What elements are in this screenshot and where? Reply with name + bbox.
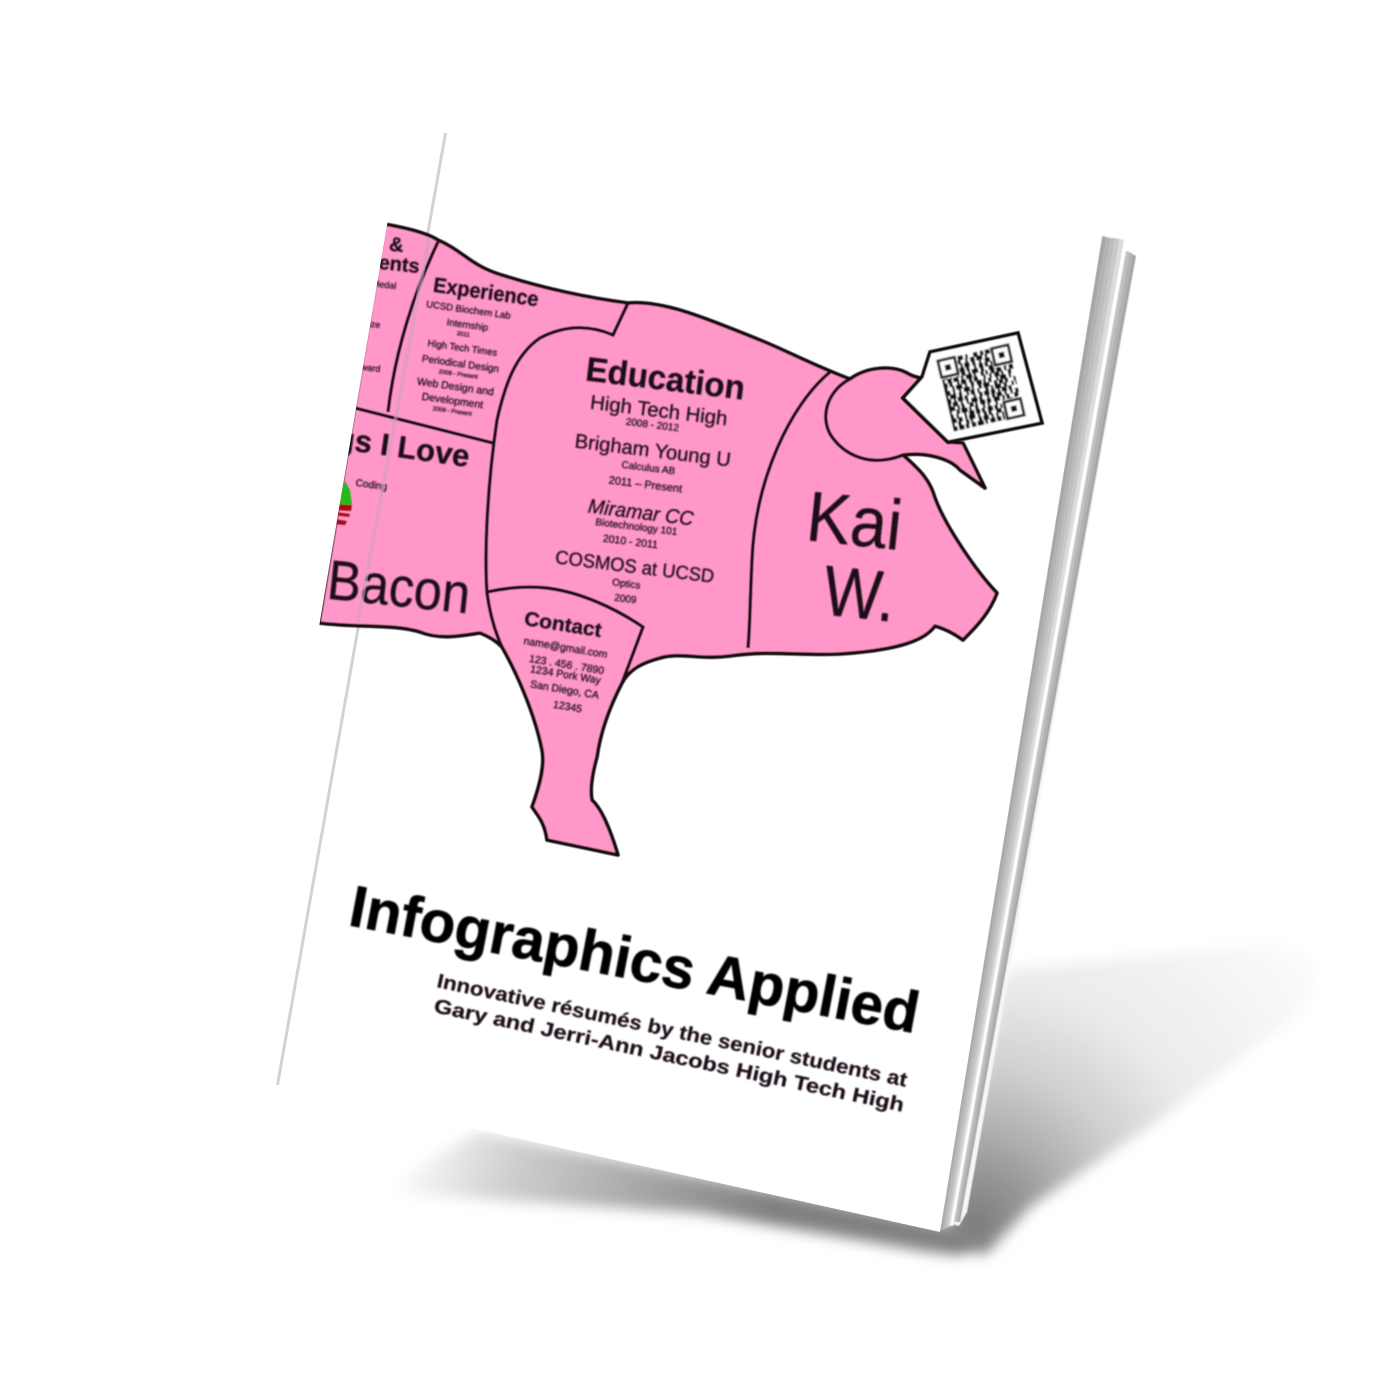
label: Experience: High Tech Times — [427, 338, 498, 359]
label: Education — [554, 350, 747, 606]
spine line behind artwork — [276, 133, 447, 1085]
label: Contact — [523, 608, 609, 715]
label: Awards and Achievements: Medal — [371, 278, 397, 291]
QR finder squares — [935, 342, 1027, 434]
label: Experience: Experience — [432, 274, 540, 311]
cut line: ear curl — [826, 379, 903, 460]
label: Kai W.: W. — [820, 552, 899, 638]
label: Awards and Achievements: Prize — [359, 318, 381, 330]
label: Education: 2011 – Present — [608, 475, 683, 495]
label: Experience — [416, 274, 540, 418]
cut line: education outline — [486, 303, 628, 647]
label: Education: Education — [584, 350, 747, 408]
tag outline — [903, 333, 1042, 442]
label: Experience: Web Design and — [416, 376, 495, 398]
label: Education: High Tech High — [589, 392, 729, 430]
label: Experience: 2009 - Present — [438, 369, 478, 381]
QR code tag — [903, 333, 1042, 442]
cut line: contact top — [487, 587, 643, 683]
label: Awards and Achievements: Awards & — [311, 225, 405, 257]
label: Education: Calculus AB — [621, 460, 676, 477]
label: Kai W. — [809, 490, 902, 622]
label: Contact: 1234 Pork Way — [529, 663, 602, 687]
label: Contact: Contact — [523, 608, 604, 642]
label: Kai W.: Kai — [803, 477, 906, 566]
pig cut-chart résumé — [269, 224, 997, 855]
label: Education: 2009 — [614, 593, 637, 606]
label: Education: 2010 - 2011 — [602, 533, 659, 551]
chart: things-I-love pie slice — [333, 481, 352, 525]
label: Experience: 2009 - Present — [432, 406, 472, 418]
book cover page — [277, 133, 1102, 1232]
label: Education: COSMOS at UCSD — [554, 547, 715, 588]
cut line: things I love top — [355, 408, 493, 443]
title: Infographics Applied — [345, 874, 925, 1046]
subtitle: Innovative résumés by the senior students at — [435, 970, 909, 1092]
label: Experience: 2011 — [456, 331, 471, 339]
label: Things I Love: Things I Love — [269, 411, 472, 474]
subtitle: Gary and Jerri-Ann Jacobs High Tech High — [432, 995, 906, 1117]
pig silhouette — [319, 224, 997, 855]
label: Experience: Development — [421, 391, 484, 411]
page edges of the booklet — [940, 236, 1136, 1230]
label: Education: Brigham Young U — [573, 431, 732, 472]
label: Awards and Achievements: Achievements — [284, 242, 421, 278]
label: Awards and Achievements — [362, 236, 420, 373]
label: Experience: Internship — [446, 317, 489, 334]
spine highlight over pig — [356, 237, 431, 622]
label: Experience: Periodical Design — [421, 354, 500, 375]
shadow: bottom floor shadow — [375, 1132, 985, 1255]
shadow: right floor shadow — [945, 945, 1317, 1255]
label: Coding: Coding — [355, 478, 388, 493]
QR code — [935, 342, 1027, 434]
label: Contact: name@gmail.com — [523, 635, 609, 661]
label: Experience: UCSD Biochem Lab — [425, 299, 511, 322]
label: Education: 2008 - 2012 — [625, 417, 680, 434]
label: Awards and Achievements: Award — [355, 361, 381, 374]
cut line: head — [748, 372, 830, 648]
label: Contact: 123 . 456 . 7890 — [528, 653, 605, 677]
label: Contact: San Diego, CA — [529, 678, 600, 702]
label: Bacon: Bacon — [325, 548, 473, 625]
label: Education: Miramar CC — [587, 496, 695, 530]
label: Education: Optics — [612, 577, 641, 592]
label: Contact: 12345 — [552, 699, 583, 715]
cut line: awards / experience — [388, 242, 438, 412]
all pig labels — [328, 236, 902, 714]
subtitle — [432, 970, 909, 1117]
label: Education: Biotechnology 101 — [595, 517, 678, 538]
